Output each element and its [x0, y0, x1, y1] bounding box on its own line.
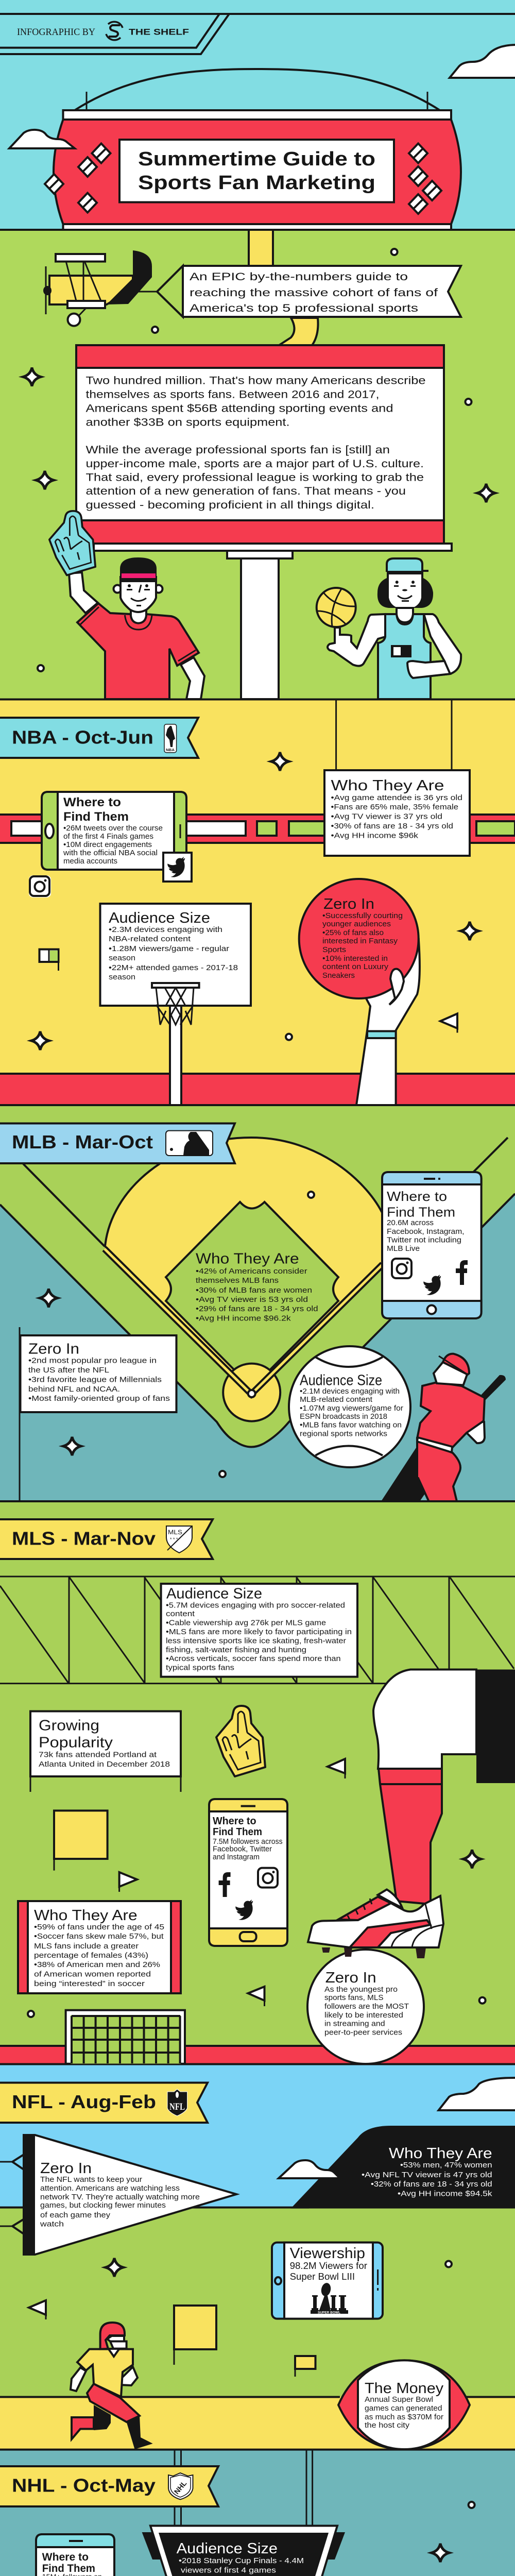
NBA where to find them: with the official NBA social [63, 849, 158, 857]
MLS audience size: typical sports fans [166, 1663, 234, 1672]
intro board [76, 345, 452, 699]
MLS who they are: •Soccer fans skew male 57%, but [34, 1932, 164, 1941]
NFL who they are: •Avg NFL TV viewer is 47 yrs old [362, 2171, 492, 2179]
NBA who they are: •Avg game attendee is 36 yrs old [331, 793, 462, 802]
NBA who they are: •Avg TV viewer is 37 yrs old [331, 812, 442, 821]
MLB where to find them: MLB Live [387, 1244, 420, 1253]
NFL ribbon [0, 2082, 208, 2123]
NBA who they are: •Avg HH income $96k [331, 831, 419, 840]
cloud left [9, 130, 75, 148]
NFL viewership tablet [272, 2243, 383, 2319]
zero in ball: Sports [322, 945, 346, 954]
MLB where to find them: Twitter not including [387, 1235, 461, 1245]
hoop pole [170, 1005, 181, 1105]
icon: NFL logo [167, 2089, 187, 2116]
MLS ribbon [0, 1519, 213, 1559]
icon: twitter box [163, 853, 192, 882]
MLB zero in [20, 1327, 176, 1501]
soccer goal [66, 2010, 185, 2064]
MLS ribbon: MLS - Mar-Nov [12, 1528, 156, 1549]
NFL the money football: Annual Super Bowl [365, 2395, 433, 2404]
MLS zero in ball: peer-to-peer services [324, 2028, 402, 2037]
zero in ball: Sneakers [322, 971, 355, 980]
ribbon connector [279, 318, 318, 345]
MLS audience size: Audience Size [166, 1586, 262, 1602]
MLB background [0, 1105, 515, 1501]
soccer leg [373, 1669, 515, 1904]
NHL where to find them: Where to [42, 2551, 89, 2563]
MLS who they are: Who They Are [34, 1907, 138, 1924]
NBA audience size: Audience Size [109, 910, 210, 926]
icon: MLS logo: * * * [170, 1537, 178, 1542]
title: Sports Fan Marketing [138, 172, 375, 194]
MLB where to find them: 20.6M across [387, 1218, 434, 1227]
NBA where to find them: Find Them [63, 810, 129, 824]
NFL viewership tablet: Viewership [290, 2245, 365, 2262]
MLS zero in ball: likely to be interested [324, 2011, 403, 2020]
icon: NBA logo: NBA [166, 749, 175, 752]
football player [71, 2323, 153, 2449]
NFL sky background [0, 2064, 515, 2208]
MLB who they are: •42% of Americans consider [196, 1267, 307, 1276]
MLS audience size: fishing, salt-water fishing and hunting [166, 1646, 306, 1654]
MLS where to find them: Facebook, Twitter [213, 1845, 272, 1854]
NFL the money football [338, 2360, 470, 2449]
MLS zero in ball: Zero In [325, 1970, 376, 1986]
MLB zero in: the US after the NFL [28, 1366, 109, 1375]
NBA where to find them [42, 792, 186, 870]
MLS audience size: •MLS fans are more likely to favor participating in [166, 1628, 352, 1636]
yellow ribbon behind tagline [249, 230, 273, 266]
man fan [69, 557, 204, 699]
MLS growing popularity: Atlanta United in December 2018 [39, 1760, 170, 1769]
MLB ribbon [0, 1123, 235, 1163]
icon: MLB logo [166, 1131, 213, 1156]
icon: MLS logo [166, 1526, 192, 1553]
icon: trophy [311, 2282, 348, 2314]
NBA where to find them: Where to [63, 795, 121, 809]
MLB where to find them: Find Them [387, 1205, 455, 1220]
NBA audience size: season [109, 973, 135, 981]
net fence [0, 1577, 515, 1684]
title: Summertime Guide to [138, 148, 375, 170]
MLB who they are: •30% of MLB fans are women [196, 1286, 312, 1295]
MLS zero in ball [307, 1950, 424, 2064]
MLB audience baseball: Audience Size [300, 1372, 382, 1389]
zero in ball: •10% interested in [322, 954, 388, 963]
grass background [0, 230, 515, 699]
woman fan [317, 558, 461, 699]
MLB who they are [196, 1251, 318, 1323]
tagline flag: America's top 5 professional sports [190, 302, 418, 314]
MLB who they are: Who They Are [196, 1251, 299, 1267]
NBA who they are: •Fans are 65% male, 35% female [331, 803, 458, 811]
MLB audience baseball: MLB-related content [300, 1395, 373, 1404]
NFL ribbon: NFL - Aug-Feb [12, 2091, 156, 2112]
billboard [45, 69, 461, 230]
NFL field line [0, 2207, 309, 2209]
intro text: That said, every professional league is working to grab the [85, 472, 424, 484]
intro text: another $33B on sports equipment. [85, 417, 289, 429]
zero in ball: •25% of fans also [322, 928, 384, 937]
NBA where to find them: •26M tweets over the course [63, 824, 163, 833]
ground line [0, 229, 515, 231]
NBA who they are: •30% of fans are 18 - 34 yrs old [331, 822, 453, 831]
NBA ribbon [0, 718, 198, 758]
MLS where to find them: Find Them [213, 1826, 262, 1838]
MLB audience baseball: ESPN broadcasts in 2018 [300, 1412, 387, 1421]
intro text: guessed - becoming proficient in all things digital. [85, 499, 374, 511]
zero in ball: interested in Fantasy [322, 937, 398, 945]
NBA audience size: •1.28M viewers/game - regular [109, 944, 229, 953]
MLS growing popularity: Popularity [39, 1734, 113, 1751]
ring dots [38, 249, 472, 671]
MLB ribbon: MLB - Mar-Oct [12, 1131, 153, 1153]
MLS audience size: less intensive sports like ice skating, fresh-water [166, 1636, 346, 1646]
NFL pennant: The NFL wants to keep your [40, 2175, 142, 2184]
zero in ball [299, 879, 419, 998]
MLS where to find them: and Instagram [213, 1853, 260, 1861]
NHL audience scoreboard: •2018 Stanley Cup Finals - 4.4M [179, 2556, 304, 2565]
NHL audience scoreboard [142, 2526, 345, 2576]
red band [0, 1074, 515, 1105]
MLB where to find them [382, 1172, 482, 1318]
NHL scoreboard cables [175, 2449, 313, 2526]
NBA audience size [100, 904, 251, 1006]
NFL yellow band [0, 2397, 515, 2450]
intro text: upper-income male, sports are a major part of U.S. culture. [85, 458, 424, 470]
icon: MLS logo: MLS [168, 1529, 182, 1536]
foam finger blue [49, 511, 95, 575]
NBA background [0, 699, 515, 1074]
red band MLS [0, 2046, 515, 2064]
NFL who they are: •32% of fans are 18 - 34 yrs old [371, 2180, 492, 2189]
intro text: themselves as sports fans. Between 2016 and 2017, [85, 389, 379, 401]
MLB zero in: •3rd favorite league of Millennials [28, 1376, 162, 1384]
NBA audience size: •22M+ attended games - 2017-18 [109, 963, 238, 972]
NHL where to find them [36, 2534, 114, 2576]
icon: NFL logo: NFL [169, 2102, 185, 2112]
MLS flags [28, 1759, 486, 2017]
zero in ball: content on Luxury [322, 962, 389, 971]
MLB who they are: themselves MLB fans [196, 1276, 279, 1285]
NFL pennant: network TV. They're actually watching more [40, 2193, 200, 2201]
MLS who they are: •38% of American men and 26% [34, 1960, 160, 1969]
tagline flag [157, 266, 461, 317]
NHL ribbon [0, 2466, 218, 2506]
NHL where to find them: Find Them [42, 2563, 95, 2574]
intro text: While the average professional sports fan is [still] an [85, 444, 390, 456]
sparkles and flags NBA [31, 922, 478, 1050]
sparkles MLB [40, 1289, 81, 1455]
tagline flag: reaching the massive cohort of fans of [190, 287, 438, 299]
icon: NHL logo [168, 2473, 193, 2499]
NFL pennant [0, 2135, 236, 2255]
NFL pennant: watch [40, 2220, 64, 2229]
intro text: Americans spent $56B attending sporting events and [85, 403, 393, 414]
sky background [0, 0, 515, 230]
MLB audience baseball: •2.1M devices engaging with [300, 1387, 400, 1396]
zero in ball: Zero In [323, 896, 374, 912]
MLB zero in: •Most family-oriented group of fans [28, 1394, 170, 1403]
cloud right NFL [439, 2078, 515, 2110]
MLB where to find them: Facebook, Instagram, [387, 1227, 465, 1236]
NBA audience size: NBA-related content [109, 935, 191, 943]
NFL field background [0, 2208, 515, 2397]
intro text: Two hundred million. That's how many Americans describe [85, 375, 425, 387]
MLB who they are: •Avg HH income $96.2k [196, 1314, 291, 1323]
MLB audience baseball [289, 1346, 410, 1467]
MLB zero in: •2nd most popular pro league in [28, 1357, 157, 1365]
MLS zero in ball: followers are the MOST [324, 2002, 409, 2011]
icon: trophy: SUPER BOWL [318, 2311, 340, 2314]
intro text [85, 375, 425, 511]
yellow band line [0, 2397, 515, 2450]
MLS who they are: •59% of fans under the age of 45 [34, 1923, 164, 1931]
title [119, 140, 394, 202]
sparkle [271, 752, 289, 771]
NFL pennant: of each game they [40, 2211, 111, 2219]
MLS growing popularity [30, 1711, 181, 1792]
tagline flag: An EPIC by-the-numbers guide to [190, 271, 408, 283]
MLS background [0, 1501, 515, 2046]
MLS growing popularity: 73k fans attended Portland at [39, 1751, 157, 1759]
soccer cleat [308, 1890, 443, 1958]
MLS audience size: •5.7M devices engaging with pro soccer-related [166, 1601, 345, 1609]
MLB who they are: •29% of fans are 18 - 34 yrs old [196, 1304, 318, 1313]
NFL who they are: •53% men, 47% women [400, 2161, 492, 2170]
NHL audience scoreboard: Audience Size [177, 2540, 278, 2557]
NFL the money football: The Money [365, 2380, 444, 2397]
NBA stripe [0, 815, 515, 843]
zero in ball: younger audiences [322, 920, 391, 928]
MLB audience baseball: •MLB fans favor watching on [300, 1421, 402, 1429]
MLB bottom line [0, 1500, 515, 1502]
MLS audience size: content [166, 1609, 195, 1618]
MLS where to find them [209, 1799, 287, 1946]
airplane [43, 250, 157, 326]
NBA who they are: Who They Are [331, 777, 444, 794]
NBA where to find them: •10M direct engagements [63, 840, 152, 849]
NBA where to find them: media accounts [63, 857, 117, 866]
MLS who they are: of American women reported [34, 1970, 151, 1978]
MLB zero in: behind NFL and NCAA. [28, 1385, 120, 1394]
NFL who they are: •Avg HH income $94.5k [398, 2190, 492, 2198]
NBA pillars [336, 699, 452, 770]
MLS audience size: •Cable viewership avg 276k per MLS game [166, 1619, 326, 1628]
NBA audience size: season [109, 954, 135, 962]
MLB audience baseball: •1.07M avg viewers/game for [300, 1404, 403, 1413]
MLS audience size: •Across verticals, soccer fans spend more than [166, 1654, 341, 1663]
NFL who they are [291, 2126, 515, 2209]
MLB audience baseball: regional sports networks [300, 1429, 387, 1438]
MLS who they are: being “interested” in soccer [34, 1979, 145, 1988]
cloud on hill [279, 2160, 340, 2178]
cloud right [450, 45, 515, 78]
NFL pennant: attention. Americans are watching less [40, 2184, 180, 2193]
NBA audience size: •2.3M devices engaging with [109, 925, 222, 934]
MLS where to find them: 7.5M followers across [213, 1837, 283, 1846]
MLS zero in ball: sports fans, MLS [324, 1993, 383, 2002]
NBA flag [39, 949, 59, 971]
NFL pennant: games, but clocking fewer minutes [40, 2201, 166, 2210]
NFL the money football: as much as $370M for [365, 2413, 443, 2421]
icon: NHL logo: NHL [173, 2479, 188, 2496]
NFL the money football: games can generated [365, 2404, 442, 2413]
intro text: attention of a new generation of fans. That means - you [85, 485, 406, 497]
header byline banner: INFOGRAPHIC BY [17, 27, 95, 38]
NFL the money football: the host city [365, 2421, 410, 2430]
header byline banner [0, 14, 515, 54]
sparkles [23, 368, 495, 502]
icon: basketball [317, 588, 356, 627]
NFL who they are: Who They Are [389, 2145, 492, 2162]
NFL viewership tablet: 98.2M Viewers for [290, 2261, 367, 2271]
MLS audience size [161, 1584, 357, 1677]
MLS who they are [18, 1901, 181, 1993]
MLB zero in: Zero In [28, 1341, 79, 1358]
NFL pennant: Zero In [40, 2160, 92, 2177]
MLS where to find them: Where to [213, 1816, 256, 1827]
NHL audience scoreboard: viewers of first 4 games [181, 2566, 276, 2575]
basketball hoop [152, 983, 199, 1025]
zero in ball: •Successfully courting [322, 911, 403, 920]
MLS who they are: MLS fans include a greater [34, 1942, 139, 1951]
MLB where to find them: Where to [387, 1189, 447, 1204]
icon: NBA logo [164, 724, 177, 753]
NFL viewership tablet: Super Bowl LIII [290, 2272, 355, 2282]
icon: instagram [29, 875, 51, 897]
MLS growing popularity: Growing [39, 1718, 99, 1734]
MLS zero in ball: As the youngest pro [324, 1985, 398, 1994]
MLS who they are: percentage of females (43%) [34, 1951, 148, 1960]
MLB who they are: •Avg TV viewer is 53 yrs old [196, 1295, 308, 1304]
NHL background [0, 2449, 515, 2576]
batter [381, 1354, 506, 1501]
arm holding ball [299, 879, 420, 1105]
NBA who they are [324, 770, 470, 856]
NBA ribbon: NBA - Oct-Jun [12, 727, 153, 748]
NFL decorations [29, 2258, 452, 2377]
foam finger yellow [216, 1706, 265, 1776]
NHL decorations [266, 2502, 475, 2576]
section line [0, 699, 515, 701]
NHL ribbon: NHL - Oct-May [12, 2475, 156, 2496]
NBA where to find them: of the first 4 Finals games [63, 832, 153, 841]
baseball field [0, 1138, 515, 1501]
MLS zero in ball: in streaming and [324, 2020, 385, 2028]
header byline banner: THE SHELF [129, 27, 189, 37]
